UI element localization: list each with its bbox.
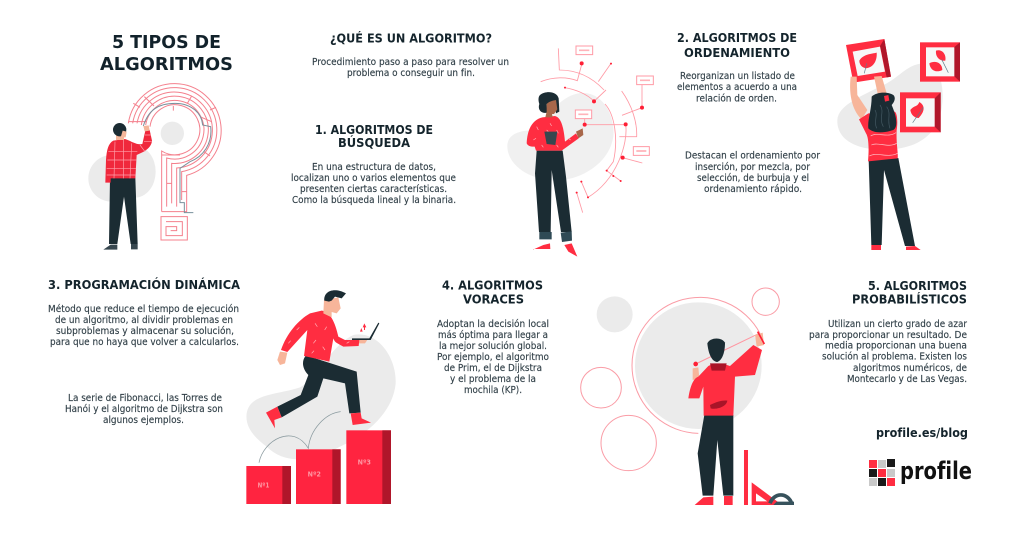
person 4	[266, 290, 379, 428]
stacked boxes: Nº2	[308, 471, 321, 479]
network diagram	[541, 46, 653, 213]
text: section 5: Montecarlo y de Las Vegas.	[847, 374, 967, 385]
stacked boxes	[246, 430, 391, 504]
person 1	[103, 123, 152, 250]
person 2	[527, 92, 583, 257]
heading: section 2: 2. ALGORITMOS DE	[677, 30, 797, 45]
text: section 4: de Prim, el de Dijkstra	[444, 363, 542, 374]
text: section 3 examples: La serie de Fibonacci, las Torres de	[68, 393, 222, 404]
title	[100, 32, 233, 75]
text: section 1: En una estructura de datos,	[312, 162, 436, 173]
heading: section 4	[442, 278, 543, 306]
text: section 3 intro: para que no haya que volver a calcularlos.	[50, 337, 239, 348]
illustration: man climbing red boxes	[246, 290, 396, 504]
text: section 4: la mejor solución global.	[439, 340, 547, 352]
text: definition: Procedimiento paso a paso para resolver un	[312, 57, 509, 68]
text: section 1: presenten ciertas características.	[300, 183, 447, 195]
text: section 3 examples	[65, 393, 223, 426]
heading: section 4: VORACES	[463, 292, 524, 306]
stacked boxes: Nº3	[358, 458, 371, 466]
text: section 5: algoritmos numéricos, de	[853, 362, 967, 374]
text: section 2 detail: Destacan el ordenamiento por	[685, 150, 821, 162]
text: section 1	[291, 162, 456, 206]
person 3	[850, 76, 921, 250]
heading: section 2	[677, 30, 797, 60]
text: section 2 detail: inserción, por mezcla, por	[695, 161, 811, 173]
text: section 2 detail: ordenamiento rápido.	[704, 183, 802, 195]
text: section 2 intro: Reorganizan un listado de	[680, 71, 795, 82]
text: section 4: y el problema de la	[450, 374, 536, 385]
text: definition: problema o conseguir un fin.	[347, 68, 475, 79]
text: section 3 examples: Hanói y el algoritmo de Dijkstra son	[65, 403, 223, 415]
heading: section 1	[315, 122, 433, 150]
profile logo	[869, 457, 972, 486]
heading: what is an algorithm: ¿QUÉ ES UN ALGORITMO?	[330, 30, 492, 46]
text: section 5: media proporcionan una buena	[825, 340, 967, 352]
illustration: woman with network diagram	[507, 46, 653, 257]
text: section 2 intro: elementos a acuerdo a una	[677, 82, 797, 93]
text: section 4: mochila (KP).	[464, 385, 522, 396]
text: section 4: Adoptan la decisión local	[437, 318, 549, 330]
text: section 2 intro	[677, 71, 797, 104]
text: section 2 detail: selección, de burbuja y el	[697, 172, 809, 184]
text: section 4	[437, 318, 549, 396]
text: section 5: solución al problema. Existen los	[822, 350, 967, 362]
text: section 1: localizan uno o varios elementos que	[291, 173, 456, 184]
outline circles	[581, 288, 779, 471]
illustration: man drawing circles	[581, 288, 794, 505]
text: section 2 intro: relación de orden.	[696, 92, 777, 104]
text: section 3 intro: subproblemas y almacenar su solución,	[56, 325, 234, 337]
illustration: woman hanging frames	[837, 39, 960, 250]
title: ALGORITMOS	[100, 54, 233, 75]
text: section 5: para proporcionar un resultado. De	[809, 330, 967, 341]
text: section 3 examples: algunos ejemplos.	[103, 415, 184, 426]
title: 5 TIPOS DE	[112, 32, 221, 53]
illustration: person solving question mark maze	[88, 84, 221, 250]
heading: section 5	[852, 278, 967, 306]
heading: section 4: 4. ALGORITMOS	[442, 278, 543, 292]
heading: section 5: PROBABILÍSTICOS	[852, 292, 967, 306]
drawing tools	[744, 450, 794, 505]
heading: section 1: BÚSQUEDA	[338, 135, 410, 150]
heading: section 1: 1. ALGORITMOS DE	[315, 122, 433, 137]
profile logo: profile	[900, 457, 972, 485]
text: definition	[312, 57, 509, 79]
question mark maze	[128, 84, 221, 240]
text: section 3 intro: Método que reduce el tiempo de ejecución	[48, 303, 239, 315]
text: section 5	[809, 319, 968, 385]
text: section 5: Utilizan un cierto grado de azar	[828, 319, 968, 330]
heading: section 5: 5. ALGORITMOS	[868, 278, 967, 293]
text: section 3 intro	[48, 303, 239, 348]
text: section 4: más óptima para llegar a	[438, 329, 548, 341]
heading: section 3: 3. PROGRAMACIÓN DINÁMICA	[48, 277, 240, 292]
picture frames	[846, 39, 960, 132]
heading: section 2: ORDENAMIENTO	[684, 45, 790, 60]
blog url: profile.es/blog	[876, 426, 968, 440]
text: section 4: Por ejemplo, el algoritmo	[437, 352, 549, 363]
compass line	[696, 333, 759, 364]
text: section 3 intro: de un algoritmo, al dividir problemas en	[55, 315, 233, 326]
logo squares	[869, 459, 895, 486]
jump arcs	[259, 412, 341, 463]
text: section 2 detail	[685, 150, 821, 195]
person 5	[688, 332, 764, 505]
stacked boxes: Nº1	[258, 481, 269, 489]
text: section 1: Como la búsqueda lineal y la binaria.	[292, 194, 456, 206]
